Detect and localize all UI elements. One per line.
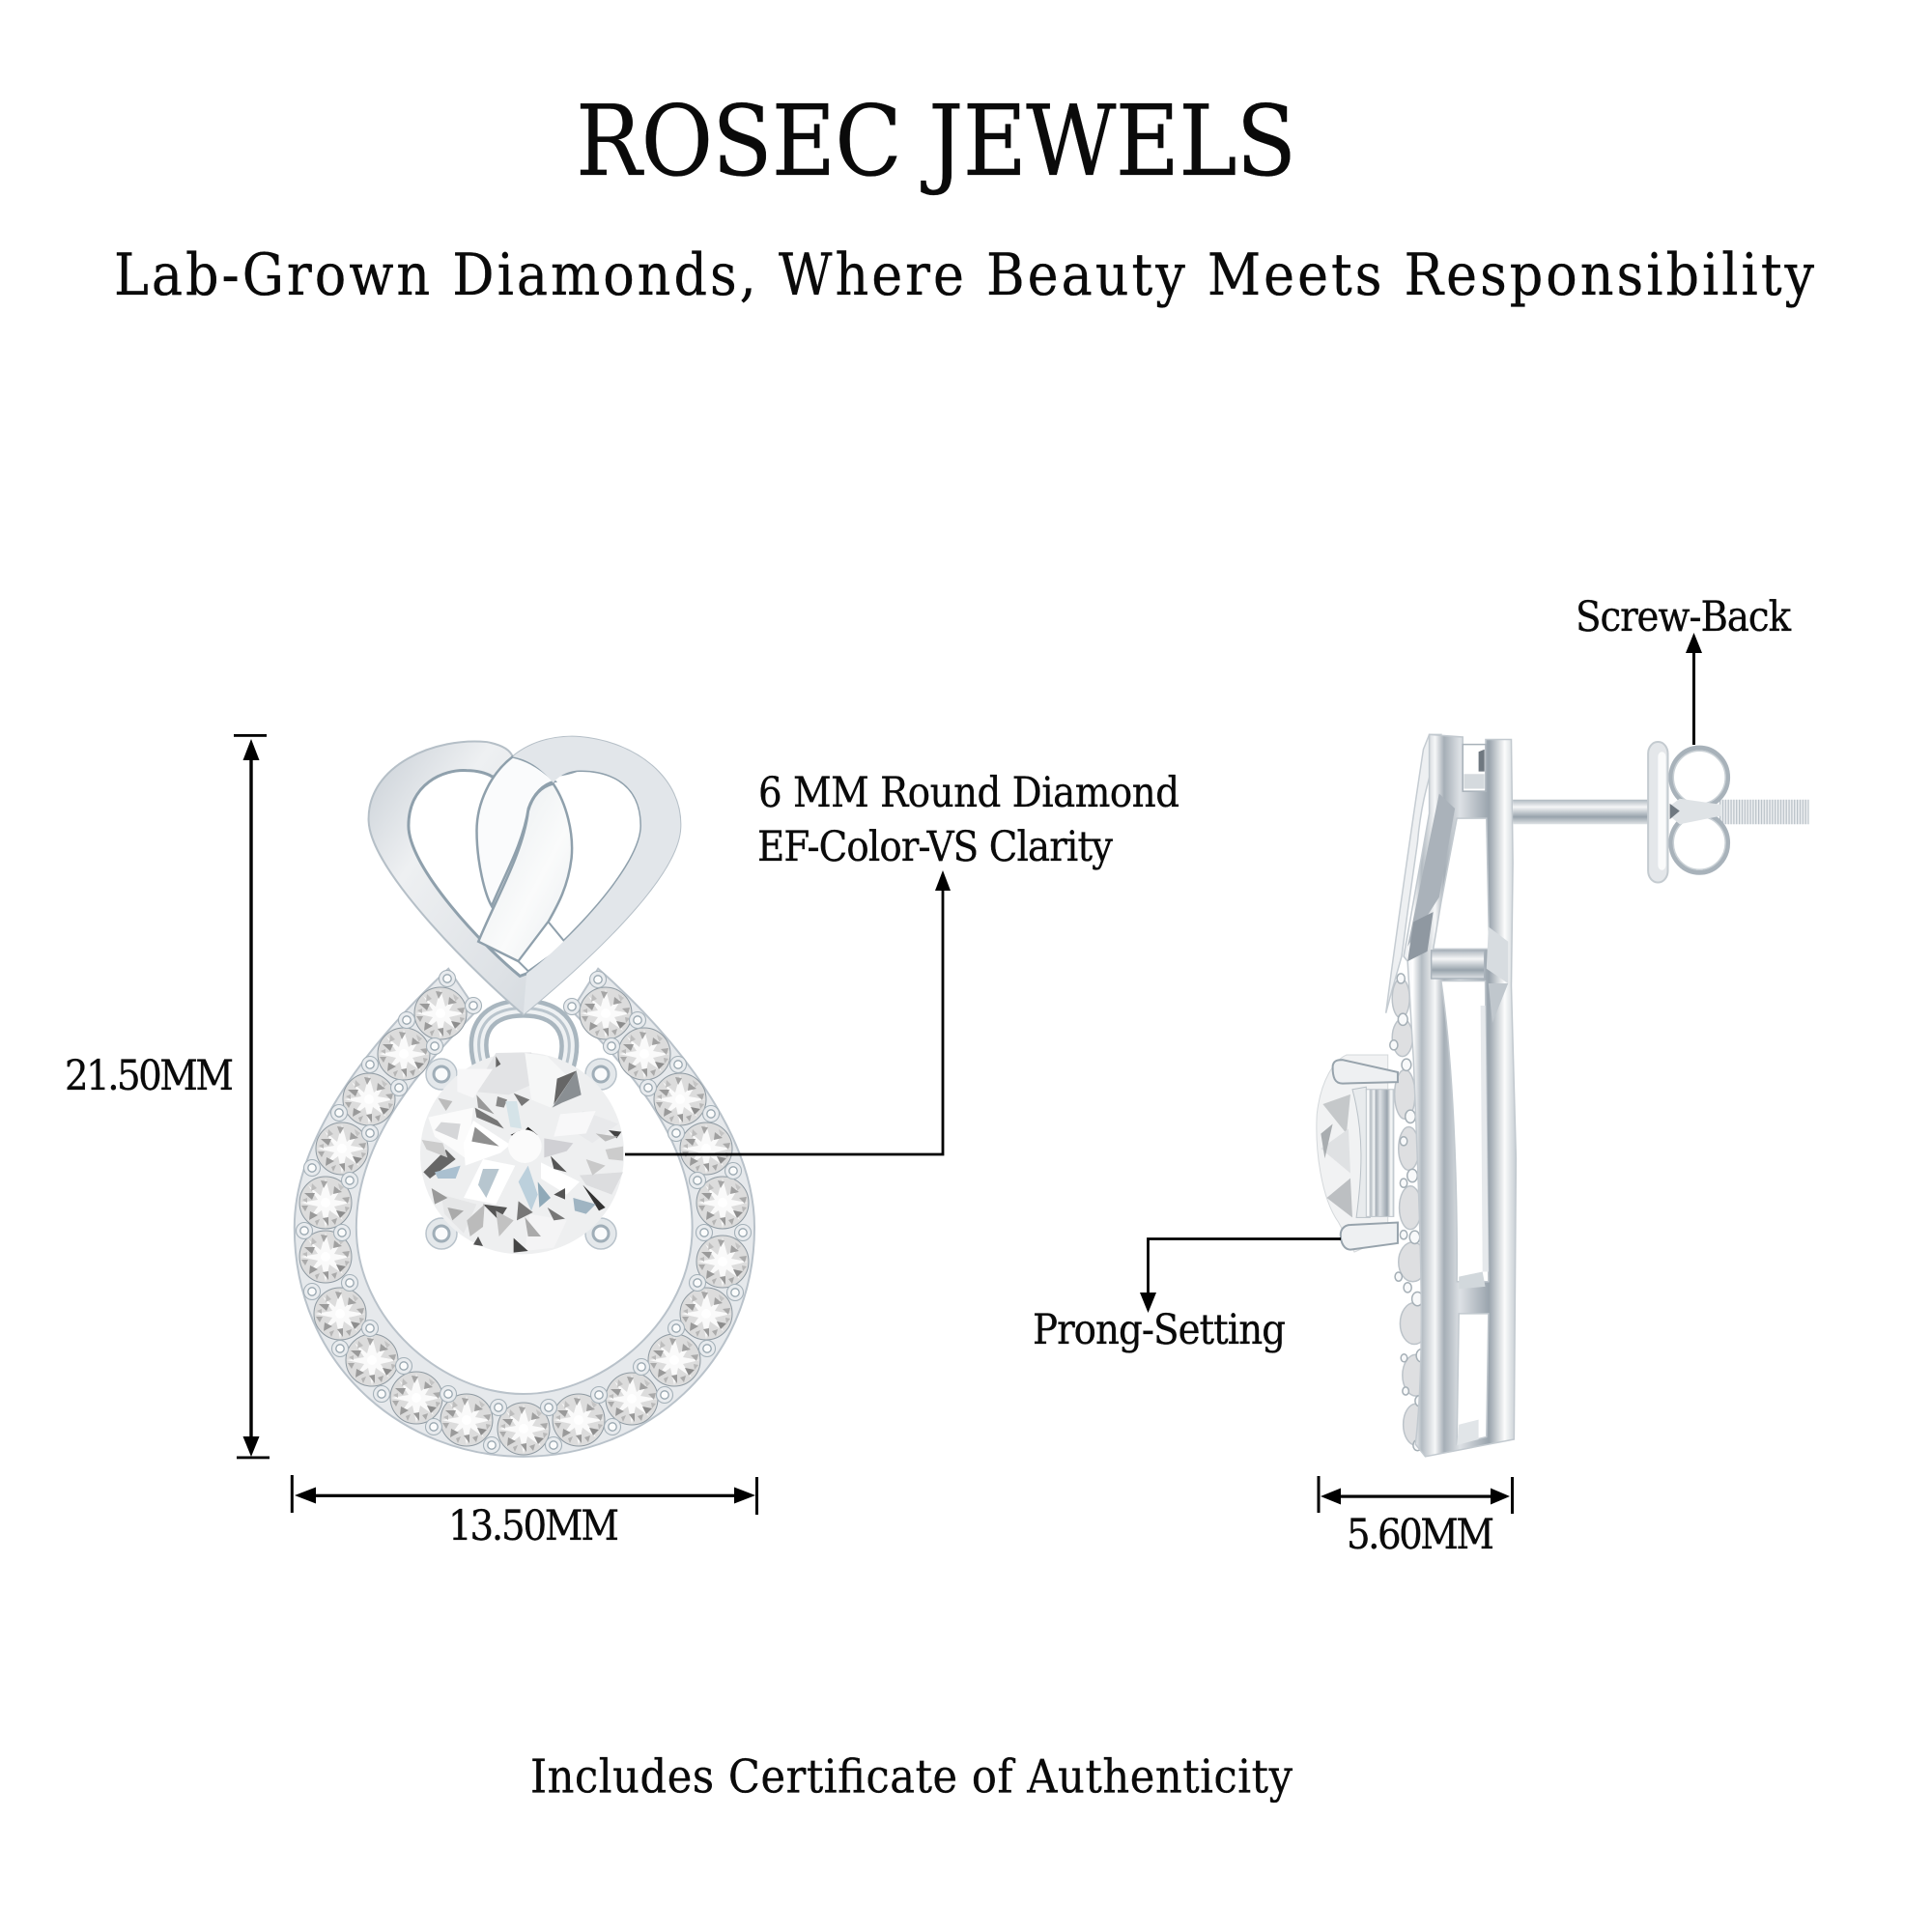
- side: centre diamond: [1317, 1055, 1398, 1252]
- subtitle: Lab-Grown Diamonds, Where Beauty Meets Responsibility: [114, 242, 1815, 309]
- side: heart edge: [1386, 734, 1441, 1013]
- side: post: [1513, 800, 1653, 824]
- bail loop: [479, 1009, 569, 1069]
- depth dimension: 5.60MM: 5.60MM: [1347, 1511, 1494, 1559]
- side: main metal frame: [1404, 734, 1516, 1457]
- callout: screw-back: [1576, 593, 1792, 745]
- title: ROSEC JEWELS: [576, 84, 1296, 198]
- callout: screw-back: Screw-Back: [1576, 593, 1792, 641]
- side view earring: [1317, 734, 1809, 1457]
- height dimension: 21.50MM: [65, 734, 270, 1459]
- side: screw thread: [1719, 800, 1809, 824]
- halo prongs: [296, 970, 752, 1453]
- centre diamond prongs: [426, 1059, 616, 1249]
- width dimension: 13.50MM: 13.50MM: [448, 1502, 619, 1550]
- callout: prong-setting: Prong-Setting: [1033, 1306, 1286, 1354]
- centre round diamond: [420, 1052, 624, 1254]
- callout: prong-setting: [1033, 1238, 1341, 1354]
- heart: [369, 737, 680, 1014]
- callout: round diamond: 6 MM Round Diamond: [758, 769, 1179, 817]
- side: butterfly screw back: [1648, 742, 1728, 882]
- depth dimension: 5.60MM: [1318, 1476, 1514, 1559]
- height dimension: 21.50MM: 21.50MM: [65, 1052, 234, 1100]
- callout: round diamond: EF-Color-VS Clarity: [757, 823, 1113, 871]
- side: small diamonds column: [1390, 974, 1430, 1451]
- teardrop halo band: [295, 969, 754, 1457]
- side: inner structure and crossbar: [1432, 926, 1508, 1445]
- width dimension: 13.50MM: [291, 1475, 758, 1550]
- halo diamonds: [299, 987, 749, 1455]
- front view earring: [295, 737, 754, 1457]
- callout: round diamond: [625, 769, 1179, 1154]
- footer: certificate note: Includes Certificate of Authenticity: [530, 1750, 1293, 1804]
